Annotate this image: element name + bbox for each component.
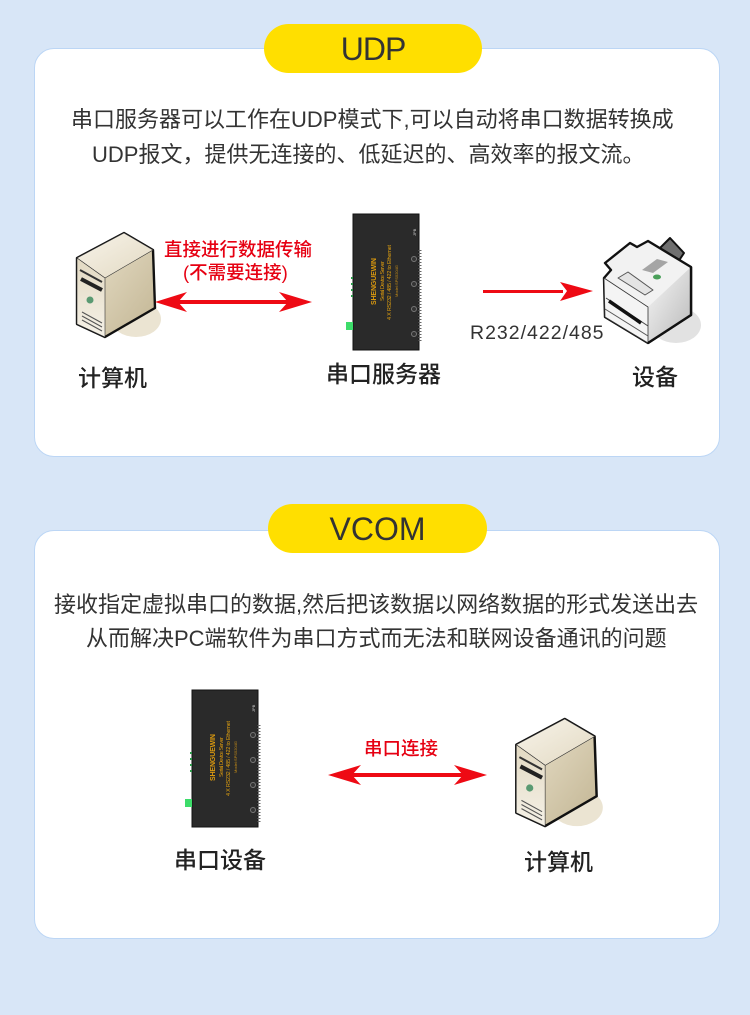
arrow: server to device — [483, 282, 593, 301]
label: serial server: 串口服务器 — [326, 361, 441, 387]
icon: serial server (UDP) — [346, 214, 420, 350]
label: device: 设备 — [632, 364, 678, 390]
label: serial standards: R232/422/485 — [470, 322, 605, 344]
icon: serial device: 4 X RS232 / 485 / 422 to Ethernet — [226, 721, 232, 796]
icon: serial server (UDP): Serial Device Server — [380, 261, 386, 301]
text block: VCOM line 2: 从而解决PC端软件为串口方式而无法和联网设备通讯的问题 — [86, 626, 667, 651]
icon: serial server (UDP): 4 X RS232 / 485 / 422 to Ethernet — [387, 245, 393, 320]
heading: VCOM — [268, 504, 487, 553]
icon: serial device: SHENGUEWIN — [210, 734, 217, 781]
panel: UDP card — [34, 48, 720, 457]
icon: printer device — [604, 238, 701, 343]
panel: VCOM card — [34, 530, 720, 939]
arrow: computer to server — [155, 292, 312, 312]
label: direct transfer: 直接进行数据传输 — [164, 239, 312, 260]
icon: serial server (UDP): JPB — [412, 228, 417, 236]
icon: serial device — [185, 690, 259, 827]
icon: serial device: Model:SPS5204G — [233, 741, 238, 773]
label: computer (VCOM): 计算机 — [524, 849, 593, 875]
heading: VCOM: VCOM — [330, 511, 426, 547]
text block: UDP line 1: 串口服务器可以工作在UDP模式下,可以自动将串口数据转换成 — [71, 107, 674, 132]
label: serial connection: 串口连接 — [364, 738, 438, 759]
label: no connection needed: (不需要连接) — [183, 262, 288, 283]
icon: computer (VCOM) — [516, 719, 603, 826]
label: computer (UDP): 计算机 — [78, 365, 147, 391]
arrow: device to computer — [328, 765, 487, 785]
icon: computer (UDP) — [77, 233, 161, 337]
heading: UDP: UDP — [341, 31, 405, 67]
text block: UDP line 2: UDP报文，提供无连接的、低延迟的、高效率的报文流。 — [92, 142, 644, 167]
icon: serial server (UDP): SHENGUEWIN — [371, 258, 378, 305]
icon: serial device: JPB — [251, 704, 256, 712]
heading: UDP — [264, 24, 482, 73]
icon: serial server (UDP): Model:SPS5204G — [394, 265, 399, 297]
icon: serial device: Serial Device Server — [219, 737, 225, 777]
label: serial device: 串口设备 — [174, 847, 266, 873]
text block: VCOM line 1: 接收指定虚拟串口的数据,然后把该数据以网络数据的形式发送出去 — [54, 592, 698, 617]
